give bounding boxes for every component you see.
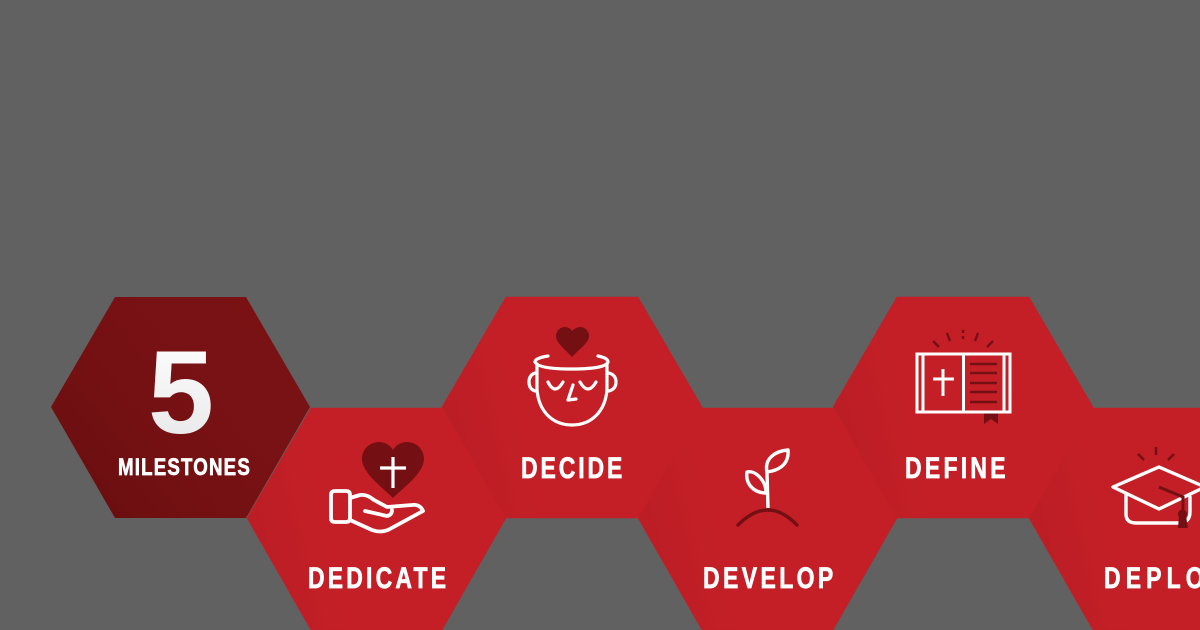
- panel: develop: [638, 408, 897, 630]
- panel: dedicate: [247, 408, 506, 630]
- label: milestones: MILESTONES: [118, 454, 250, 481]
- icon: graduation cap: [1113, 447, 1200, 528]
- icon: sprout: [738, 450, 797, 525]
- number 5: 5: [148, 327, 214, 459]
- panel: define: [833, 297, 1093, 518]
- label: develop: DEVELOP: [703, 561, 833, 595]
- label: decide: DECIDE: [521, 451, 622, 485]
- icon: head with heart: [529, 327, 616, 425]
- icon: heart in hand: [331, 442, 424, 532]
- panel: deploy: [1029, 408, 1200, 630]
- label: define: DEFINE: [905, 451, 1006, 485]
- label: dedicate: DEDICATE: [308, 561, 446, 595]
- panel: 5 milestones: [51, 297, 310, 518]
- icon: open bible: [917, 330, 1010, 424]
- panel: decide: [442, 297, 702, 518]
